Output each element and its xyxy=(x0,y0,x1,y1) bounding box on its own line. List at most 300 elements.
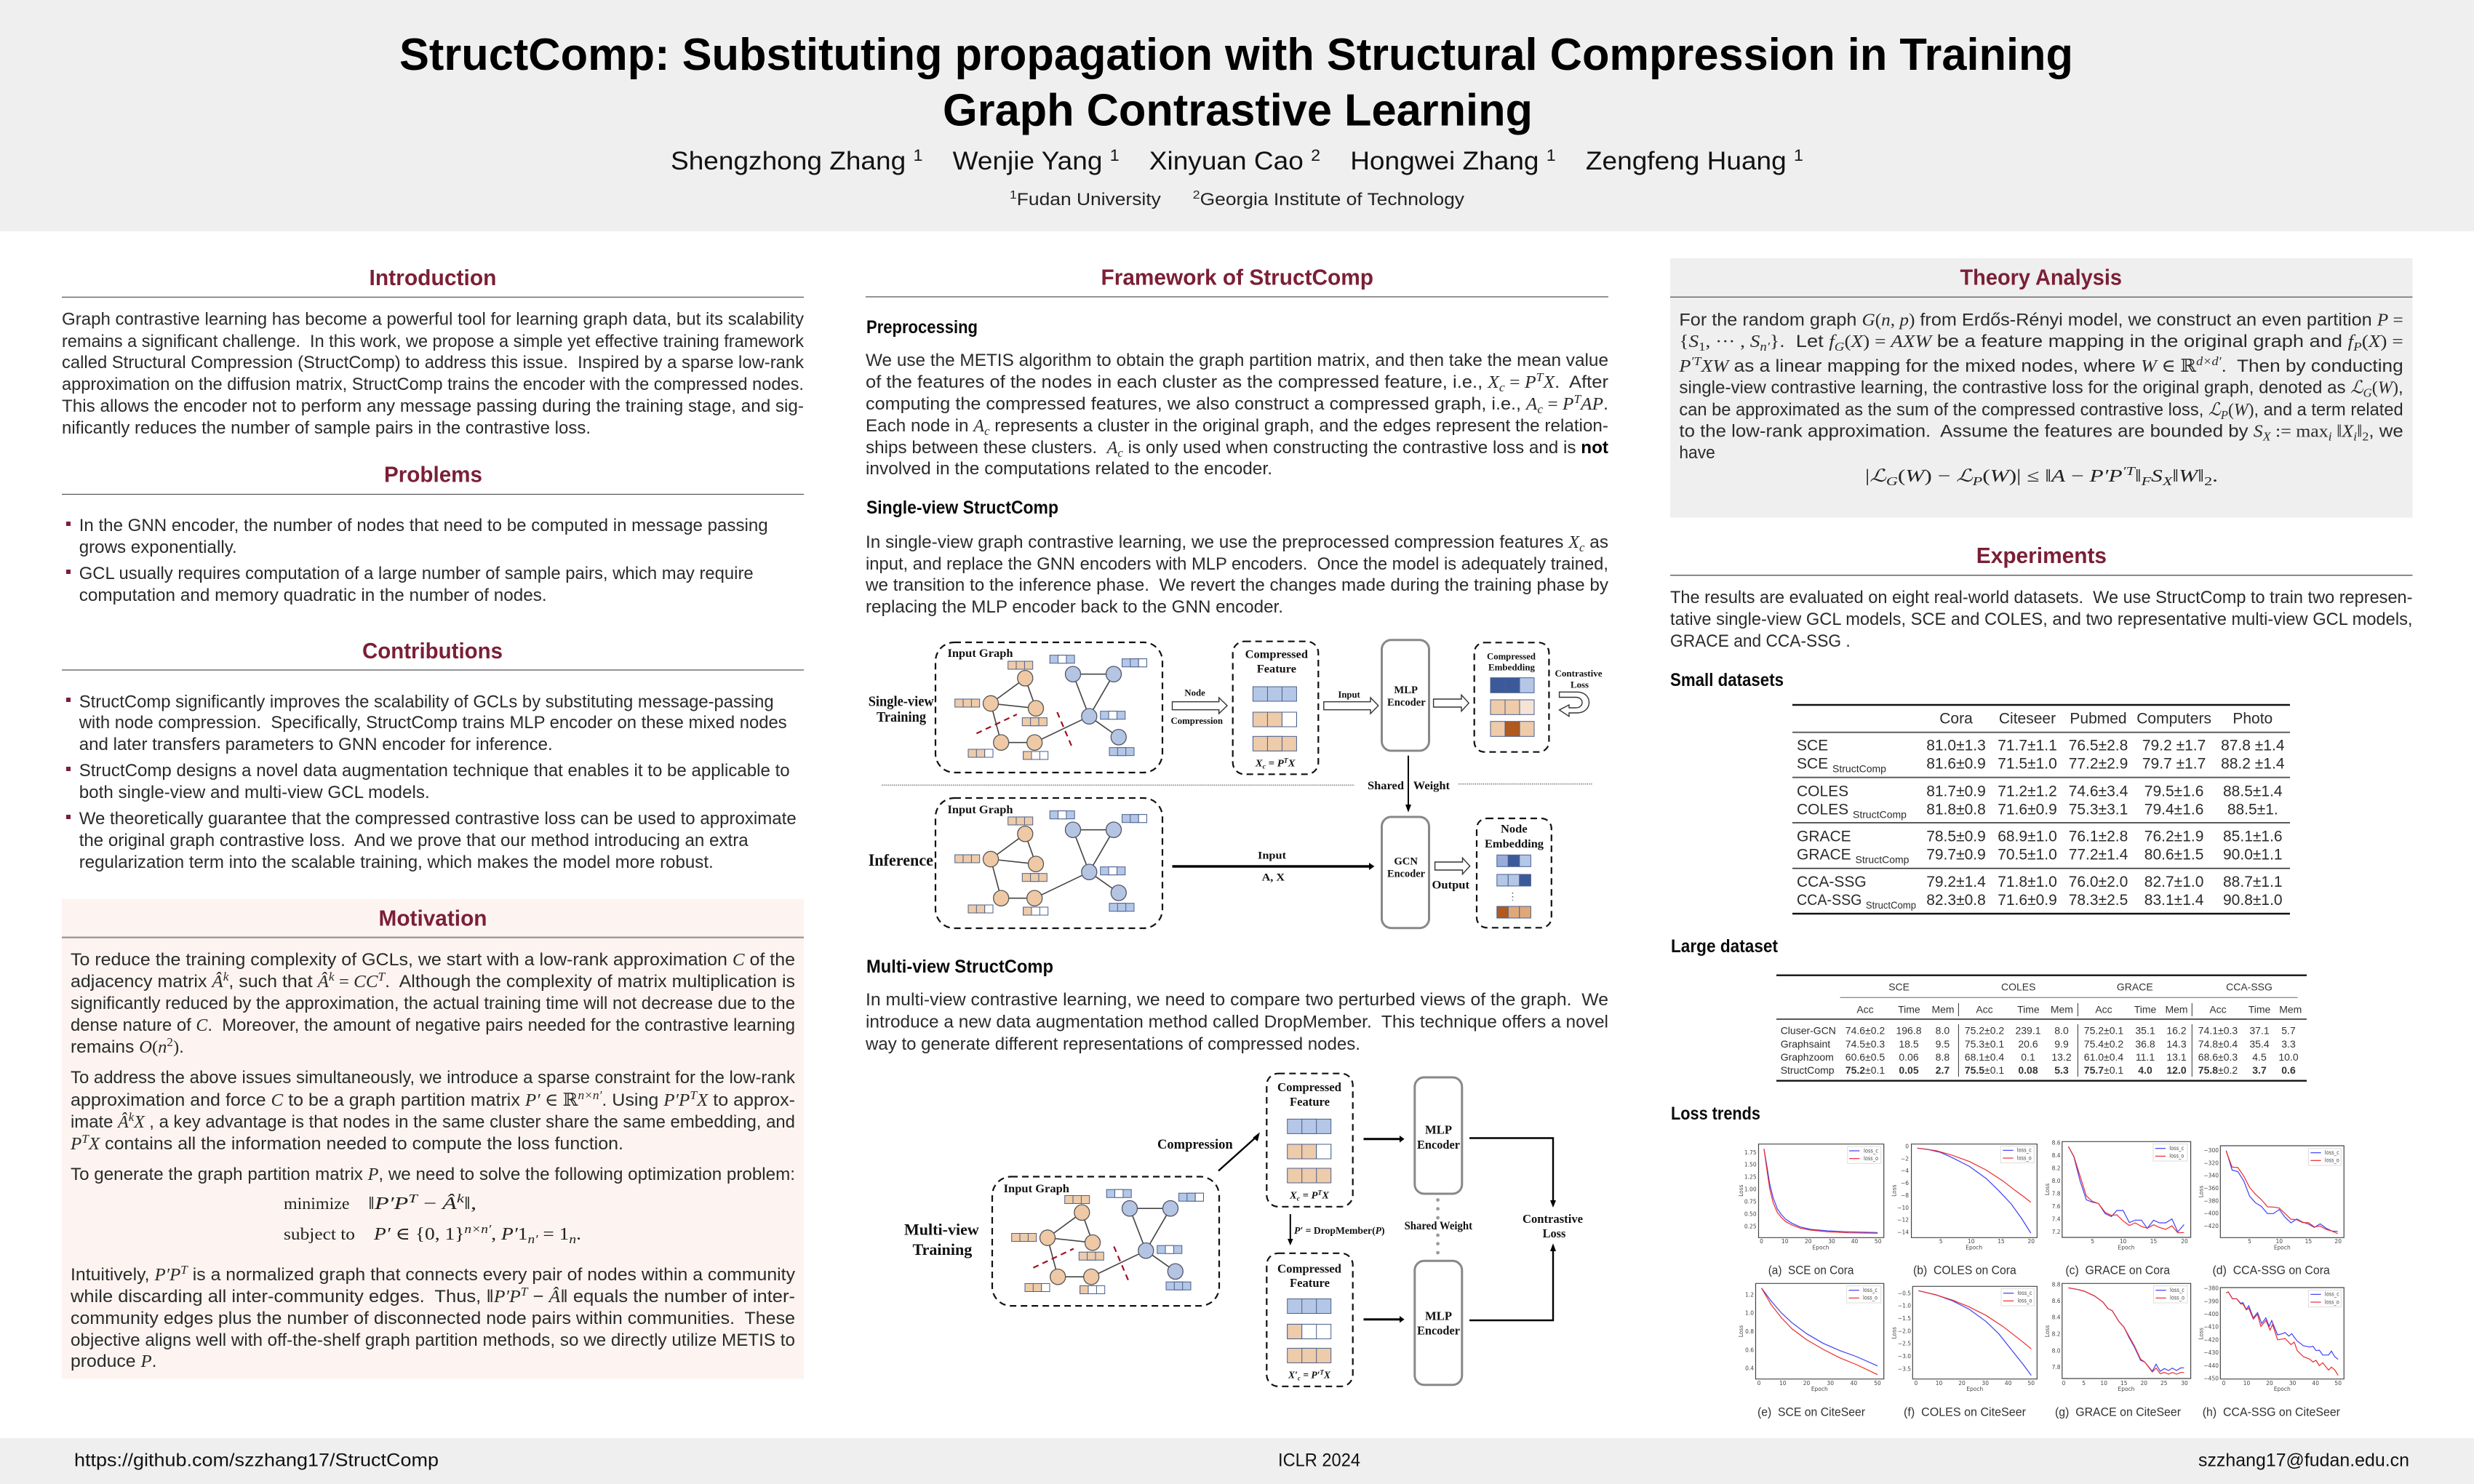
chart c labels: 7.8 xyxy=(2052,1191,2061,1197)
equation: loss bound: . xyxy=(2212,467,2218,486)
chart d labels: 5 xyxy=(2248,1238,2251,1245)
table: large dataset: 3.7 xyxy=(2252,1064,2267,1076)
table: large dataset: 35.1 xyxy=(2135,1025,2155,1037)
table: large dataset: 0.05 xyxy=(1899,1064,1919,1076)
table: small datasets: 81.6±0.9 xyxy=(1926,756,1986,773)
text: motivation paragraph 2: T xyxy=(690,1088,698,1102)
table: large dataset: 2.7 xyxy=(1936,1064,1950,1076)
table: small datasets: 79.5±1.6 xyxy=(2144,783,2203,799)
chart captions: (g) GRACE on CiteSeer xyxy=(2055,1405,2181,1419)
chart b labels: −12 xyxy=(1897,1217,1909,1224)
equation: optimization problem: P′ ∈ {0, 1} xyxy=(374,1225,455,1244)
table: large dataset: 74.8±0.4 xyxy=(2198,1038,2238,1050)
table: large dataset: CCA-SSG xyxy=(2226,981,2273,993)
chart h labels: −430 xyxy=(2203,1349,2219,1356)
chart g labels: 7.8 xyxy=(2052,1364,2061,1371)
panel: compressed feature 1: Feature xyxy=(1290,1095,1330,1109)
table: small datasets: 88.2 ±1.4 xyxy=(2221,756,2285,773)
text: theory: to the low-rank approximation. Assume the features are bounded by S xyxy=(1679,422,2262,442)
chart d curves: CCA-SSG on Cora xyxy=(2220,1146,2344,1237)
heading: experiments: Experiments xyxy=(1976,543,2107,568)
text: preprocessing: We use the METIS algorithm to obtain the graph partition matrix, and then take the mean value xyxy=(866,351,1608,370)
chart captions: (h) CCA-SSG on CiteSeer xyxy=(2203,1405,2340,1419)
equation: loss bound: ′T xyxy=(2123,464,2136,478)
table: small datasets: StructComp xyxy=(1853,808,1907,820)
table: large dataset: 8.8 xyxy=(1936,1051,1950,1063)
table: large dataset: 35.4 xyxy=(2249,1038,2270,1050)
text: preprocessing: computing the compressed features, we also construct a compressed graph, i.e., A xyxy=(866,394,1537,414)
title: StructComp: Substituting propagation with Structural Compression in Training xyxy=(399,30,2073,80)
chart d labels: Epoch xyxy=(2274,1244,2291,1250)
table: large dataset: Acc xyxy=(1976,1003,1993,1015)
chart g labels: loss_c xyxy=(2170,1287,2184,1293)
authors: Hongwei Zhang xyxy=(1320,147,1547,175)
table: small datasets: 71.7±1.1 xyxy=(1998,738,2057,754)
equation: optimization problem: n xyxy=(569,1232,576,1246)
arrow: shared weight xyxy=(1368,756,1451,813)
panel: node embedding xyxy=(1477,818,1552,928)
chart g labels: 8.2 xyxy=(2052,1331,2061,1337)
panel: motivation xyxy=(62,899,804,1379)
text: motivation paragraph 1: k xyxy=(223,970,229,984)
panel: compressed feature 2: Compressed xyxy=(1277,1261,1342,1275)
text: theory: , we xyxy=(2369,422,2403,442)
chart captions: (f) COLES on CiteSeer xyxy=(1904,1405,2026,1419)
text: motivation paragraph 2: X xyxy=(88,1134,100,1154)
text: preprocessing: P xyxy=(1562,392,1603,414)
chart g labels: 8.4 xyxy=(2052,1315,2061,1321)
chart d labels: loss_o xyxy=(2325,1157,2339,1164)
label: contrastive loss: Contrastive xyxy=(1555,668,1603,679)
chart h labels: Loss xyxy=(2198,1328,2204,1340)
chart e labels: 20 xyxy=(1803,1380,1810,1387)
arrow: shared weight: Weight xyxy=(1413,780,1451,792)
text: motivation paragraph 1: CC xyxy=(354,970,386,992)
list: problems: GCL usually requires computation of a large number of sample pairs, which may require xyxy=(79,564,754,583)
table: large dataset: Mem xyxy=(2279,1003,2302,1015)
text: motivation paragraph 2: approximation and force C to be a graph partition matrix P′ ∈ ℝ xyxy=(71,1090,577,1110)
text: motivation paragraph 2: to approx- xyxy=(713,1090,793,1110)
text: theory: ‖ xyxy=(2357,422,2362,442)
table: small datasets: 82.7±1.0 xyxy=(2144,874,2203,890)
chart c labels: 20 xyxy=(2181,1238,2188,1245)
chart d labels xyxy=(2198,1147,2342,1250)
text: motivation paragraph 2: n×n′ xyxy=(578,1088,602,1102)
table: small datasets: StructComp xyxy=(1832,763,1886,775)
chart captions: (a) SCE on Cora xyxy=(1768,1264,1854,1277)
chart b curves: COLES on Cora xyxy=(1912,1144,2037,1237)
table: small datasets: Pubmed xyxy=(2070,710,2127,727)
chart f labels: 30 xyxy=(1982,1380,1989,1387)
chart g labels: 15 xyxy=(2120,1380,2128,1387)
panel: compressed feature 1: X xyxy=(1321,1190,1330,1201)
table: small datasets: COLES xyxy=(1797,783,1848,799)
chart c labels: 7.6 xyxy=(2052,1203,2061,1210)
equation: optimization problem: = 1 xyxy=(538,1225,569,1244)
chart e labels: 0 xyxy=(1757,1380,1761,1387)
table: large dataset: 8.0 xyxy=(1936,1025,1950,1037)
chart c labels xyxy=(2044,1139,2188,1250)
chart f labels: −1.5 xyxy=(1898,1315,1911,1322)
text: introduction body: approximation on the diffusion matrix, StructComp trains the encoder with the compressed nodes. xyxy=(62,375,804,394)
text: theory: P xyxy=(2220,408,2228,422)
chart g labels: 20 xyxy=(2141,1380,2147,1387)
equation: loss bound: 2 xyxy=(2204,474,2212,488)
chart g labels: 0 xyxy=(2062,1380,2066,1387)
chart e labels: 1.2 xyxy=(1745,1291,1754,1298)
chart g labels: 8.0 xyxy=(2052,1347,2061,1354)
arrow: output xyxy=(1432,858,1470,892)
text: motivation paragraph 1: , such that xyxy=(228,972,318,992)
table: small datasets: StructComp xyxy=(1866,899,1916,911)
arrow: node compression: Node xyxy=(1184,687,1205,698)
text: theory: X) = AXW be a feature mapping in the original graph and f xyxy=(1851,332,2353,351)
text: theory: X xyxy=(2341,422,2354,442)
chart a labels: 1.00 xyxy=(1744,1186,1757,1192)
table: large dataset: 68.1±0.4 xyxy=(1965,1051,2004,1063)
subheading: large dataset: Large dataset xyxy=(1671,936,1779,957)
chart d labels: −340 xyxy=(2203,1173,2219,1179)
label: shared weight xyxy=(1405,1198,1473,1254)
table: large dataset: 61.0±0.4 xyxy=(2084,1051,2123,1063)
panel: compressed feature: X xyxy=(1288,758,1296,769)
table: large dataset: SCE xyxy=(1888,981,1910,993)
authors: Xinyuan Cao xyxy=(1120,147,1311,175)
text: theory: X) = xyxy=(2369,332,2401,351)
text: motivation paragraph 1: T xyxy=(378,970,386,984)
equation: loss bound: ‖ xyxy=(2135,467,2142,486)
text: theory: S xyxy=(1750,332,1760,351)
equation: optimization problem: subject to xyxy=(284,1225,355,1243)
chart a labels: 0 xyxy=(1760,1238,1763,1245)
arrow: drop member xyxy=(1288,1214,1385,1245)
text: theory: ( xyxy=(2372,378,2378,397)
chart captions: (e) SCE on CiteSeer xyxy=(1757,1405,1865,1419)
table: small datasets: 78.5±0.9 xyxy=(1926,829,1986,845)
panel: introduction xyxy=(62,265,805,438)
text: single-view: In single-view graph contrastive learning, we use the preprocessed compression features X xyxy=(866,532,1579,552)
panel: compressed feature: Feature xyxy=(1257,663,1296,675)
text: theory: n′ xyxy=(1760,340,1770,354)
equation: loss bound: X xyxy=(2162,474,2173,488)
text: motivation paragraph 1: To reduce the training complexity of GCLs, we start with a low-rank approximation C of the xyxy=(71,950,795,970)
list: problems: In the GNN encoder, the number of nodes that need to be computed in message passing xyxy=(79,516,768,535)
chart g labels: 10 xyxy=(2100,1380,2107,1387)
chart e curves: SCE on CiteSeer xyxy=(1755,1283,1884,1379)
text: theory: as a linear mapping for the mixed nodes, where W ∈ ℝ xyxy=(1733,356,2194,376)
authors: Zengfeng Huang xyxy=(1556,147,1794,175)
chart c curves: GRACE on Cora xyxy=(2062,1141,2191,1237)
box: MLP encoder: Encoder xyxy=(1387,697,1426,709)
table: small datasets: 71.6±0.9 xyxy=(1998,801,2057,818)
label: contrastive loss xyxy=(1555,668,1603,717)
chart c labels: Loss xyxy=(2044,1184,2051,1195)
text: theory: . Then by conducting xyxy=(2222,356,2403,376)
table: small datasets: CCA-SSG xyxy=(1797,892,1867,909)
text: single-view: as xyxy=(1585,532,1608,552)
text: preprocessing: c xyxy=(1117,446,1123,460)
box: MLP encoder 2 xyxy=(1415,1261,1462,1385)
box: MLP encoder 2: Encoder xyxy=(1417,1324,1460,1338)
chart g labels: loss_o xyxy=(2170,1295,2184,1301)
text: motivation paragraph 4: community edges plus the number of disconnected node pairs within communities. These xyxy=(71,1309,795,1328)
table: large dataset: 3.3 xyxy=(2281,1038,2296,1050)
chart f labels: 10 xyxy=(1936,1380,1942,1387)
text: motivation paragraph 1: = xyxy=(335,972,354,992)
table: large dataset: 8.0 xyxy=(2054,1025,2069,1037)
chart a labels: Epoch xyxy=(1813,1244,1829,1250)
footer: venue: ICLR 2024 xyxy=(1278,1451,1360,1471)
chart c labels: 8.4 xyxy=(2052,1152,2061,1159)
table: small datasets: 71.8±1.0 xyxy=(1998,874,2057,890)
text: motivation paragraph 2: X xyxy=(696,1090,709,1110)
header band xyxy=(0,0,2474,231)
table: small datasets: 79.7±0.9 xyxy=(1926,847,1986,863)
chart f labels: Epoch xyxy=(1966,1386,1984,1392)
table: large dataset: 18.5 xyxy=(1899,1038,1919,1050)
heading: problems: Problems xyxy=(384,462,482,487)
table: large dataset: 5.3 xyxy=(2054,1064,2069,1076)
equation: optimization problem: T xyxy=(408,1192,419,1205)
text: preprocessing: Each node in A xyxy=(866,416,984,436)
text: preprocessing: = xyxy=(1543,394,1563,414)
equation: loss bound: ( xyxy=(1898,467,1905,486)
text: theory: ‖ xyxy=(2332,422,2342,442)
table: large dataset: 13.2 xyxy=(2051,1051,2072,1063)
chart c labels: loss_c xyxy=(2169,1145,2184,1152)
table: small datasets: SCE xyxy=(1797,738,1828,754)
arrow: input xyxy=(1324,689,1378,714)
chart h labels: Epoch xyxy=(2274,1386,2291,1392)
text: motivation paragraph 1: adjacency matrix Â xyxy=(71,972,223,992)
table: small datasets: 83.1±1.4 xyxy=(2144,892,2204,909)
panel: node embedding: Embedding xyxy=(1485,838,1544,850)
chart a labels: 40 xyxy=(1851,1238,1858,1245)
chart h labels: −440 xyxy=(2203,1363,2219,1369)
equation: loss bound: W )| ≤ ‖ A − P′P xyxy=(1990,467,2115,486)
text: preprocessing: of the features of the nodes in each cluster as the compressed feature, i.e., X xyxy=(866,372,1499,392)
charts: plot areas and curves xyxy=(1755,1141,2344,1379)
text: preprocessing: AP xyxy=(1579,394,1603,414)
table: small datasets: 76.0±2.0 xyxy=(2069,874,2128,890)
subheading: single-view: Single-view StructComp xyxy=(866,498,1058,518)
label: shared weight: Shared Weight xyxy=(1405,1220,1473,1232)
chart h labels: −390 xyxy=(2203,1298,2219,1304)
chart b labels: −14 xyxy=(1897,1229,1909,1236)
chart g labels: Epoch xyxy=(2118,1386,2135,1392)
chart a labels: 10 xyxy=(1781,1238,1789,1245)
table: small datasets: 71.2±1.2 xyxy=(1998,783,2057,799)
chart c labels: 8.2 xyxy=(2052,1165,2061,1171)
chart b labels: loss_o xyxy=(2017,1154,2032,1161)
table: large dataset: 68.6±0.3 xyxy=(2198,1051,2238,1063)
text: multi-view: In multi-view contrastive learning, we need to compare two perturbed views of the graph. We xyxy=(866,990,1608,1010)
table: small datasets: 71.5±1.0 xyxy=(1998,756,2057,773)
equation: loss bound: P xyxy=(1971,474,1982,488)
equation: optimization problem: minimize xyxy=(284,1194,349,1213)
table: large dataset: COLES xyxy=(2001,981,2035,993)
chart f labels: 40 xyxy=(2005,1380,2012,1387)
chart h labels: 0 xyxy=(2222,1380,2226,1387)
table: large dataset: 75.4±0.2 xyxy=(2084,1038,2123,1050)
table: large dataset: 12.0 xyxy=(2166,1064,2187,1076)
panel: compressed feature 1: T xyxy=(1318,1189,1322,1196)
table: large dataset: Acc xyxy=(1856,1003,1874,1015)
label: contrastive loss xyxy=(1523,1212,1583,1240)
chart f labels: 0 xyxy=(1915,1380,1918,1387)
text: experiments intro: tative single-view GCL models, SCE and COLES, and two representative multi-view GCL models, xyxy=(1670,610,2412,629)
equation: optimization problem: n×n′ xyxy=(464,1222,492,1236)
chart h labels: 50 xyxy=(2334,1380,2342,1387)
chart h labels: −450 xyxy=(2203,1376,2219,1382)
text: introduction body: This allows the encoder not to perform any message passing during the training stage, and sig- xyxy=(62,396,804,416)
text: single-view: we transition to the inference phase. We revert the changes made during the training phase by xyxy=(865,575,1609,595)
authors: 1 xyxy=(1794,146,1803,164)
table: small datasets: 76.5±2.8 xyxy=(2069,738,2128,754)
table: large dataset: Mem xyxy=(2165,1003,2188,1015)
heading: introduction: Introduction xyxy=(370,265,496,290)
table: small datasets: 77.2±1.4 xyxy=(2069,847,2128,863)
label: single-view training: Training xyxy=(877,709,926,725)
table: small datasets: Citeseer xyxy=(1999,710,2056,727)
table: large dataset: Time xyxy=(2134,1003,2157,1015)
text: single-view xyxy=(865,532,1609,617)
chart captions: (d) CCA-SSG on Cora xyxy=(2213,1264,2330,1277)
chart h labels: −380 xyxy=(2203,1285,2219,1292)
text: multi-view: introduce a new data augmentation method called DropMember. This technique offers a novel xyxy=(866,1013,1608,1032)
chart d labels: Loss xyxy=(2198,1186,2204,1197)
heading: theory analysis: Theory Analysis xyxy=(1960,264,2122,290)
arrow: to MLP 1 xyxy=(1363,1136,1405,1143)
table: small datasets: 88.5±1.4 xyxy=(2223,783,2283,799)
chart a labels: loss_c xyxy=(1864,1147,1878,1154)
input graph: multi-view xyxy=(992,1177,1219,1306)
chart b labels: −10 xyxy=(1897,1205,1909,1211)
table: large dataset: 10.0 xyxy=(2278,1051,2299,1063)
footer band xyxy=(0,1438,2474,1484)
text: theory: For the random graph G(n, p) from Erdős-Rényi model, we construct an even partition P = xyxy=(1679,311,2403,330)
table: large dataset: 14.3 xyxy=(2166,1038,2187,1050)
list: contributions: We theoretically guarantee that the compressed contrastive loss can be used to approximate xyxy=(79,809,797,829)
panel: compressed embedding xyxy=(1475,642,1549,752)
table: large dataset: 60.6±0.5 xyxy=(1845,1051,1885,1063)
table: small datasets: 78.3±2.5 xyxy=(2069,892,2128,909)
text: introduction body: nificantly reduces the number of sample pairs in the contrastive loss. xyxy=(62,418,591,438)
chart g labels: 5 xyxy=(2082,1380,2086,1387)
chart g labels: Loss xyxy=(2044,1325,2051,1337)
chart e labels: 0.8 xyxy=(1745,1328,1754,1335)
chart a labels: 20 xyxy=(1805,1238,1812,1245)
table: small datasets: 88.7±1.1 xyxy=(2223,874,2283,890)
text: theory: G xyxy=(2363,386,2372,400)
chart d labels: 15 xyxy=(2305,1238,2312,1245)
chart c labels: 7.2 xyxy=(2052,1229,2061,1235)
chart c labels: Epoch xyxy=(2118,1244,2135,1250)
text: motivation paragraph 4: − xyxy=(528,1287,549,1307)
panel: compressed feature 2: Feature xyxy=(1290,1276,1330,1290)
chart c labels: 8.6 xyxy=(2052,1139,2061,1146)
table: small datasets: 85.1±1.6 xyxy=(2223,829,2283,845)
chart b labels: −4 xyxy=(1901,1168,1909,1174)
panel: compressed embedding: Embedding xyxy=(1488,662,1535,673)
authors: 1 xyxy=(1547,146,1556,164)
chart b labels: Loss xyxy=(1891,1184,1897,1197)
box: MLP encoder: MLP xyxy=(1394,685,1418,696)
table: small datasets: 87.8 ±1.4 xyxy=(2221,738,2285,754)
chart d labels: −300 xyxy=(2203,1147,2219,1154)
panel: compressed embedding: Compressed xyxy=(1487,651,1536,662)
equation: optimization problem xyxy=(284,1192,581,1246)
chart f labels: −3.0 xyxy=(1898,1353,1911,1360)
chart b labels: 5 xyxy=(1939,1238,1943,1245)
text: theory: . Let f xyxy=(1779,332,1834,351)
chart e labels: 10 xyxy=(1779,1380,1787,1387)
table: large dataset: Mem xyxy=(1931,1003,1955,1015)
text: motivation paragraph 1: significantly reduced by the approximation, the actual training time will not decrease due to the xyxy=(71,994,795,1013)
chart b labels xyxy=(1891,1143,2035,1250)
box: MLP encoder 1 xyxy=(1415,1077,1462,1194)
text: motivation paragraph 4 xyxy=(70,1263,796,1371)
table: small datasets: 90.8±1.0 xyxy=(2223,892,2283,909)
chart a labels: 0.25 xyxy=(1744,1223,1757,1229)
text: experiments intro: GRACE and CCA-SSG . xyxy=(1670,631,1851,651)
table: small datasets: 81.7±0.9 xyxy=(1926,783,1986,799)
chart b labels: −6 xyxy=(1901,1180,1909,1186)
chart f labels: −2.0 xyxy=(1898,1328,1911,1334)
table: large dataset: 37.1 xyxy=(2249,1025,2270,1037)
chart f labels: loss_c xyxy=(2017,1290,2032,1296)
panel: compressed feature 1: X xyxy=(1290,1190,1296,1201)
input graph: training: Input Graph xyxy=(947,647,1013,660)
box: GCN encoder: GCN xyxy=(1394,855,1418,867)
authors: Wenjie Yang xyxy=(922,147,1110,175)
table: large dataset: 4.0 xyxy=(2138,1064,2152,1076)
text: motivation paragraph 1: Â xyxy=(316,970,335,992)
list: contributions: with node compression. Specifically, StructComp trains MLP encoder on these mixed nodes xyxy=(79,713,787,733)
table: large dataset: 9.9 xyxy=(2054,1038,2069,1050)
chart g labels xyxy=(2044,1281,2188,1392)
title: Graph Contrastive Learning xyxy=(943,86,1533,136)
table: large dataset: Time xyxy=(2248,1003,2271,1015)
chart h labels: loss_c xyxy=(2325,1291,2339,1298)
label: multi-view training xyxy=(904,1221,979,1258)
table: large dataset: Graphsaint xyxy=(1781,1038,1830,1050)
text: theory: ( xyxy=(2362,332,2369,351)
chart a labels: 50 xyxy=(1875,1238,1882,1245)
affiliations: Georgia Institute of Technology xyxy=(1200,190,1464,210)
table: large dataset: 5.7 xyxy=(2281,1025,2296,1037)
panel: compressed feature: c xyxy=(1263,762,1266,770)
panel: compressed feature 2: = P′ xyxy=(1301,1371,1320,1381)
chart f labels xyxy=(1891,1290,2035,1392)
table: large dataset xyxy=(1776,976,2307,1081)
chart e labels: 1.0 xyxy=(1745,1310,1754,1317)
table: large dataset: Mem xyxy=(2051,1003,2073,1015)
table: large dataset: 16.2 xyxy=(2166,1025,2187,1037)
chart f labels: 50 xyxy=(2028,1380,2035,1387)
table: large dataset: 74.5±0.3 xyxy=(1845,1038,1885,1050)
authors: 1 xyxy=(1110,146,1120,164)
text: preprocessing: . xyxy=(1603,394,1608,414)
chart a labels: 1.50 xyxy=(1744,1162,1757,1168)
input graph: training xyxy=(935,642,1162,773)
table: large dataset: Cluser-GCN xyxy=(1781,1025,1836,1037)
arrow: compression: Compression xyxy=(1157,1137,1233,1152)
chart d labels: 10 xyxy=(2276,1238,2283,1245)
text: preprocessing: represents a cluster in the original graph, and the edges represent the relation- xyxy=(990,416,1608,436)
table: small datasets: 71.6±0.9 xyxy=(1998,892,2057,909)
equation: loss bound: S xyxy=(2151,467,2163,486)
